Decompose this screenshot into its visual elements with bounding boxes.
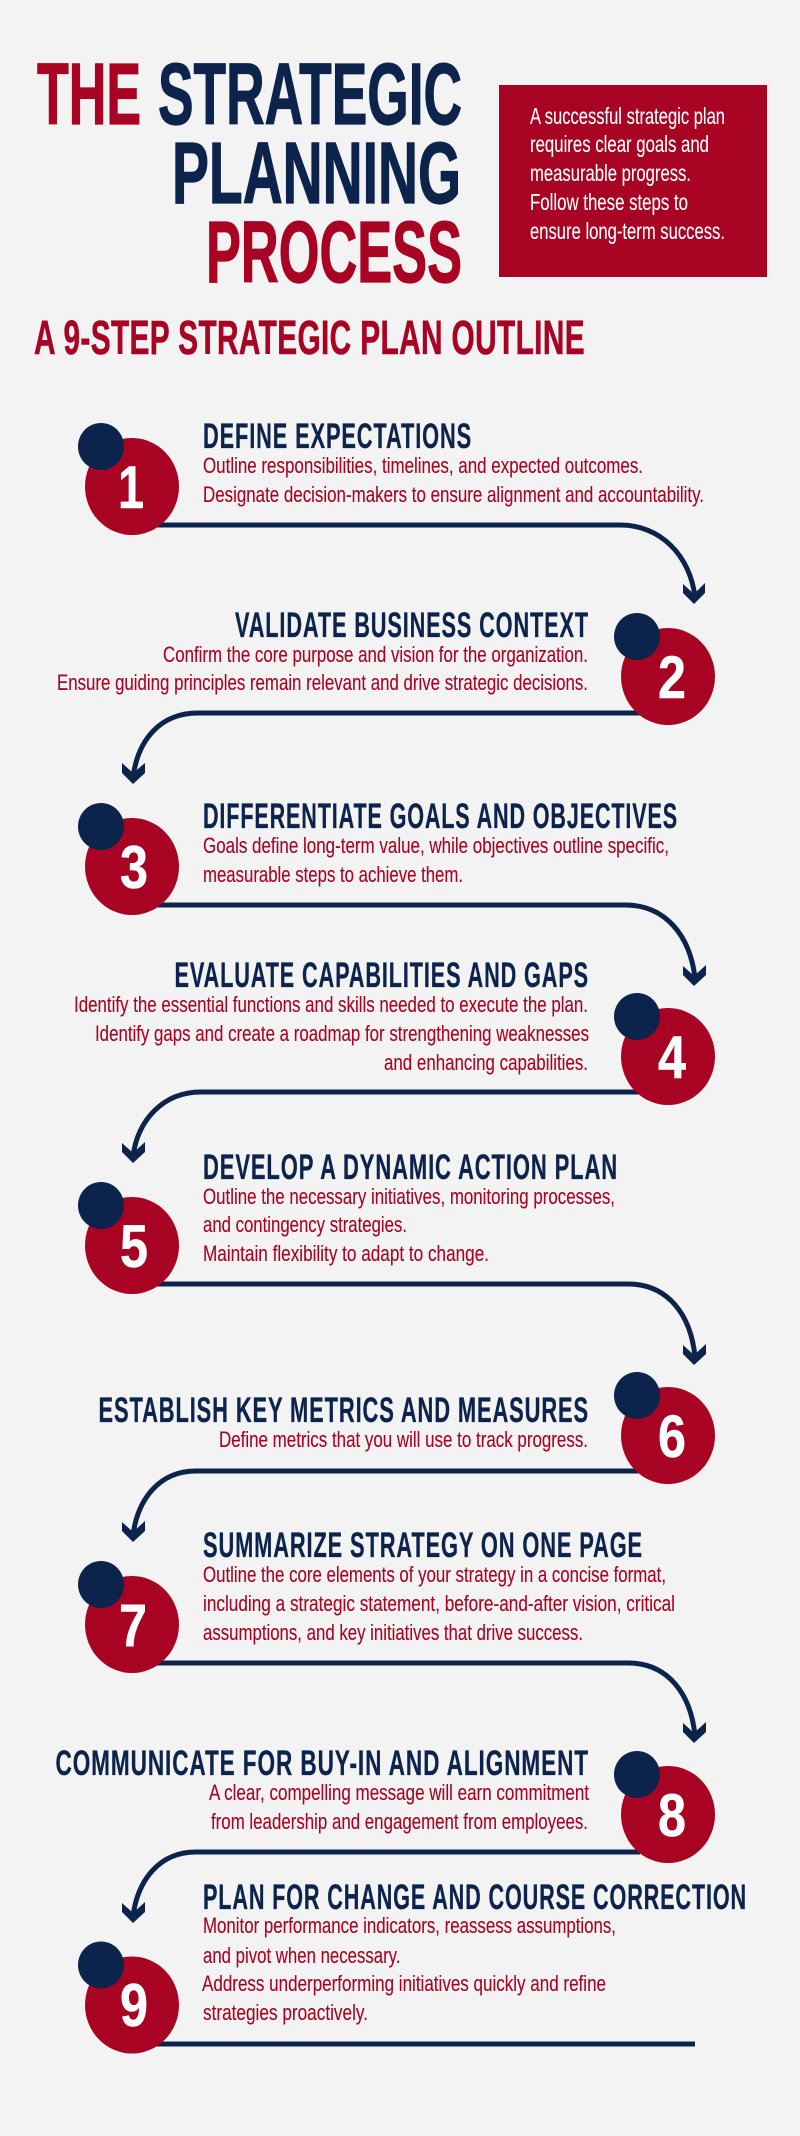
badge 3 [78, 803, 179, 915]
badge 6: 6 [658, 1403, 686, 1470]
badge 4 [614, 993, 715, 1105]
badge 8: 8 [658, 1782, 686, 1849]
step 9 [78, 1878, 747, 2054]
description 7 [203, 1562, 675, 1645]
description 8: A clear, compelling message will earn commitment [209, 1780, 589, 1805]
description 7: including a strategic statement, before-and-after vision, critical [203, 1591, 675, 1616]
description 3: measurable steps to achieve them. [203, 862, 463, 887]
description 2: Ensure guiding principles remain relevant and drive strategic decisions. [57, 670, 588, 695]
badge 6 [614, 1372, 715, 1484]
arrow: step 3 to 4 [150, 905, 706, 986]
badge 1: 1 [118, 454, 144, 521]
arrow: step 6 to 7 [122, 1471, 640, 1542]
badge 8 [614, 1751, 715, 1863]
step 5 [78, 1148, 706, 1365]
description 1: Outline responsibilities, timelines, and expected outcomes. [203, 453, 643, 478]
title [37, 46, 462, 301]
panel: intro callout: A successful strategic plan [530, 103, 725, 129]
description 8 [209, 1780, 589, 1834]
panel: intro callout [499, 85, 767, 277]
step 4 [74, 956, 715, 1163]
description 9: Address underperforming initiatives quickly and refine [202, 1971, 606, 1996]
description 7: assumptions, and key initiatives that drive success. [203, 1620, 583, 1645]
heading: define expectations: DEFINE EXPECTATIONS [203, 417, 472, 456]
step 3 [78, 797, 706, 986]
panel: intro callout: measurable progress. [530, 160, 691, 186]
badge 2: 2 [658, 644, 686, 711]
description 3: Goals define long-term value, while objectives outline specific, [203, 833, 669, 858]
badge 7 [78, 1561, 179, 1673]
description 9: and pivot when necessary. [203, 1943, 400, 1968]
arrow: step 2 to 3 [122, 713, 640, 784]
description 5: and contingency strategies. [203, 1212, 407, 1237]
badge 9 [78, 1942, 179, 2054]
description 5: Maintain flexibility to adapt to change. [203, 1241, 489, 1266]
step 6 [98, 1372, 715, 1542]
description 7: Outline the core elements of your strategy in a concise format, [203, 1562, 666, 1587]
arrow: step 5 to 6 [150, 1284, 706, 1365]
badge 5: 5 [120, 1213, 148, 1280]
description 6: Define metrics that you will use to track progress. [219, 1427, 588, 1452]
description 2 [57, 642, 588, 695]
arrow: step 7 to 8 [150, 1663, 706, 1743]
title: PLANNING [172, 125, 461, 222]
badge 3: 3 [120, 834, 148, 901]
arrow: step 8 to 9 [122, 1852, 640, 1923]
description 4: Identify the essential functions and skills needed to execute the plan. [74, 992, 588, 1017]
description 5 [203, 1184, 615, 1266]
badge 4: 4 [658, 1024, 687, 1091]
title: PROCESS [206, 204, 462, 301]
badge 2 [614, 613, 715, 725]
title: STRATEGIC [158, 46, 462, 143]
arrow: step 1 to 2 [150, 525, 705, 604]
description 3 [203, 833, 669, 887]
description 4: Identify gaps and create a roadmap for strengthening weaknesses [95, 1021, 589, 1046]
step 8 [56, 1744, 715, 1923]
description 2: Confirm the core purpose and vision for the organization. [163, 642, 588, 667]
panel: intro callout: Follow these steps to [530, 189, 688, 215]
panel: intro callout: ensure long-term success. [530, 218, 725, 244]
panel: intro callout: requires clear goals and [530, 131, 709, 157]
description 9: strategies proactively. [203, 2000, 368, 2025]
heading: validate business context: VALIDATE BUSINESS CONTEXT [235, 606, 589, 645]
step 2 [57, 606, 715, 784]
closing line [150, 2042, 695, 2046]
description 8: from leadership and engagement from employees. [211, 1809, 588, 1834]
badge 5 [78, 1182, 179, 1294]
description 1 [203, 453, 704, 507]
arrow: step 4 to 5 [122, 1092, 640, 1163]
step 1 [78, 417, 705, 604]
badge 7: 7 [119, 1592, 147, 1659]
description 4 [74, 992, 589, 1075]
description 9: Monitor performance indicators, reassess assumptions, [203, 1913, 616, 1938]
description 5: Outline the necessary initiatives, monitoring processes, [203, 1184, 615, 1209]
badge 9: 9 [120, 1972, 148, 2039]
step 7 [78, 1526, 706, 1743]
badge 1 [78, 423, 179, 535]
title: THE [37, 46, 141, 143]
description 4: and enhancing capabilities. [384, 1050, 588, 1075]
description 9 [202, 1913, 616, 2025]
